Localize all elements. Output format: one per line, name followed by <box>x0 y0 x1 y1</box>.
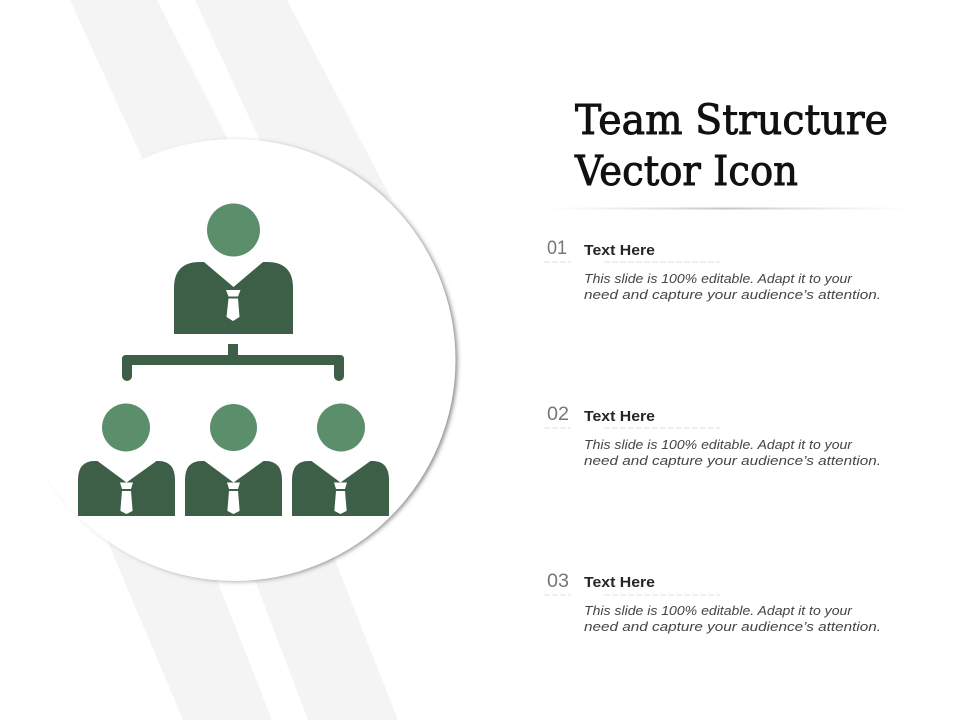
connector <box>122 344 344 381</box>
description 02: This slide is 100% editable. Adapt it to your <box>584 437 853 452</box>
description 03: This slide is 100% editable. Adapt it to your <box>584 603 853 618</box>
heading 01: Text Here <box>584 242 655 259</box>
rule 03 <box>544 594 720 596</box>
heading 03: Text Here <box>584 574 655 591</box>
heading 02: Text Here <box>584 408 655 425</box>
icon: middle person <box>185 404 282 516</box>
rule 02 <box>544 427 720 429</box>
description 02: need and capture your audience’s attention. <box>584 453 881 468</box>
title divider <box>545 208 910 210</box>
item 03 <box>544 571 881 634</box>
description 02 <box>584 437 881 468</box>
description 01 <box>584 271 881 302</box>
item 01 <box>544 238 881 302</box>
description 03 <box>584 603 881 634</box>
main circle <box>14 139 458 582</box>
description 03: need and capture your audience’s attention. <box>584 619 881 634</box>
description 01: need and capture your audience’s attention. <box>584 287 881 302</box>
description 01: This slide is 100% editable. Adapt it to your <box>584 271 853 286</box>
title: Vector Icon <box>574 147 798 195</box>
title <box>574 96 888 195</box>
icon: top person <box>174 204 293 334</box>
title: Team Structure <box>575 96 888 144</box>
icon: left person <box>78 404 175 516</box>
icon: team hierarchy <box>78 204 389 516</box>
background stripes <box>70 0 398 720</box>
item 02 <box>544 404 881 468</box>
number 01: 01 <box>547 238 567 259</box>
number 02: 02 <box>547 404 569 425</box>
icon: right person <box>292 404 389 516</box>
rule 01 <box>544 261 720 263</box>
number 03: 03 <box>547 571 569 592</box>
